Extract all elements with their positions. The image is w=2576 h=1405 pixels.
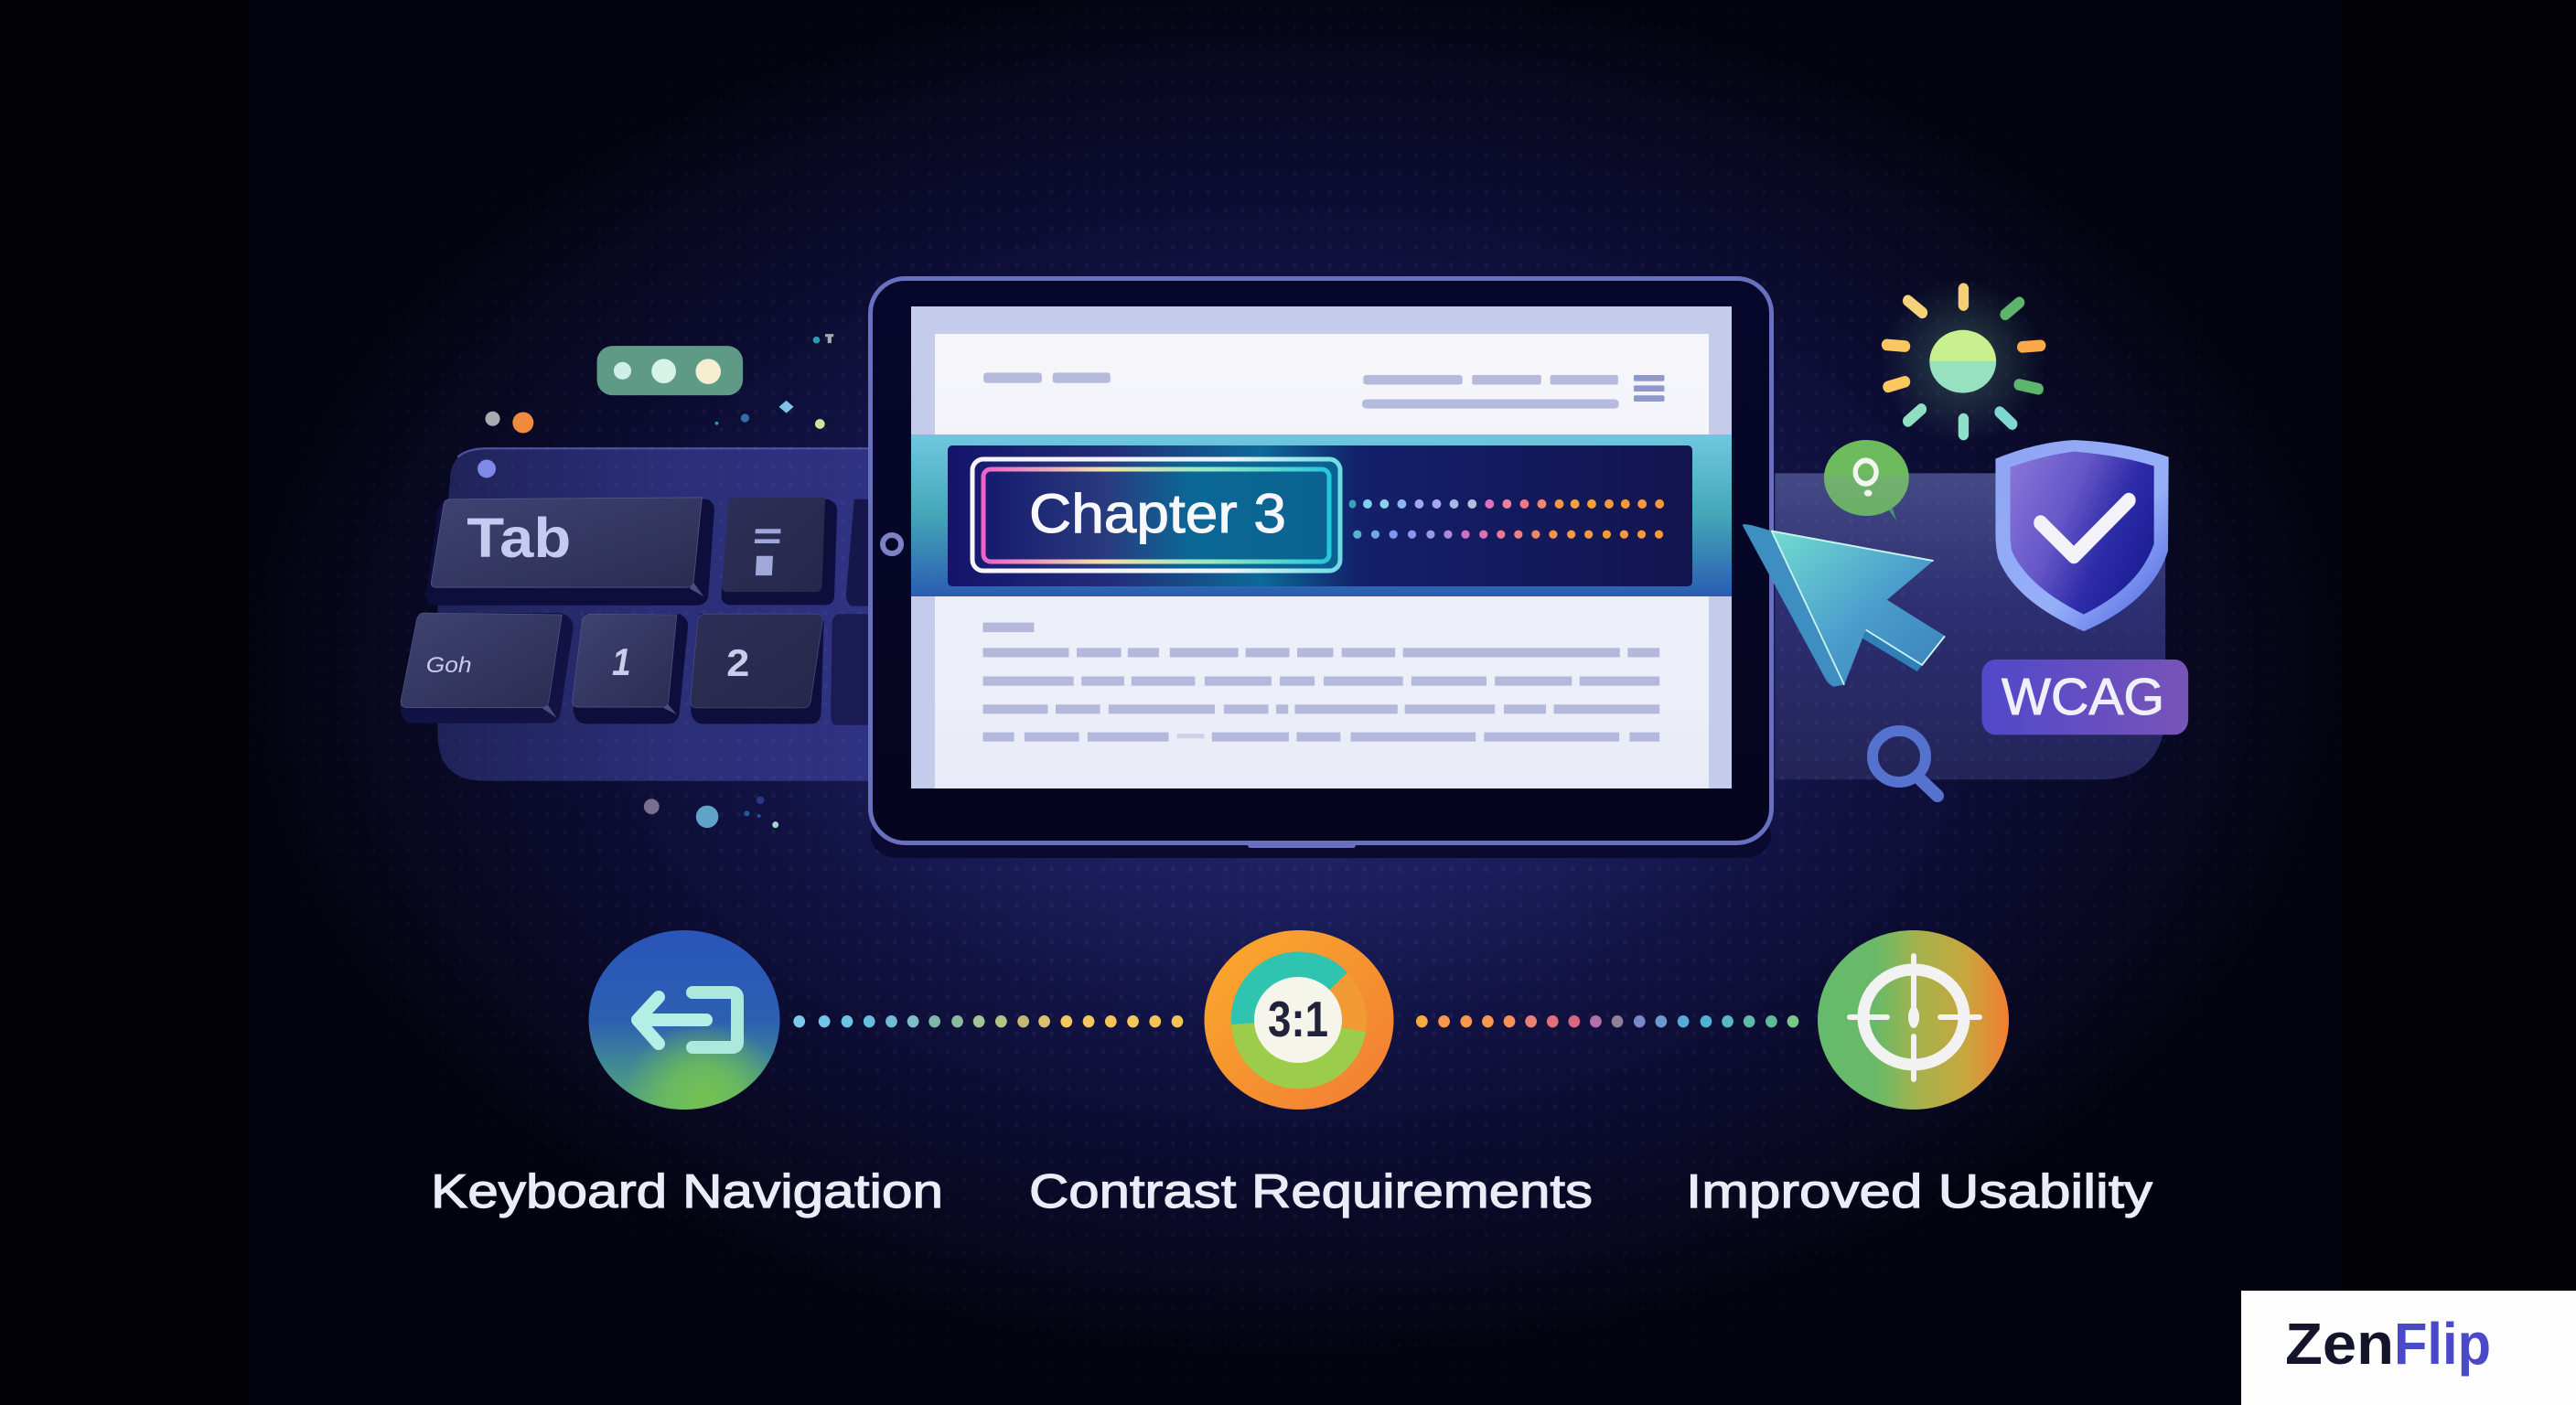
dot grid texture bbox=[459, 80, 2131, 1255]
badge label: WCAG: WCAG bbox=[2002, 668, 2164, 726]
chapter band bbox=[911, 434, 1732, 596]
header skeleton lines bbox=[983, 372, 1664, 409]
key: 1 bbox=[573, 614, 688, 724]
icon: keyboard navigation circle bbox=[589, 930, 779, 1110]
tablet body bbox=[871, 278, 1771, 843]
label: Improved Usability: Improved Usability bbox=[1686, 1165, 2152, 1218]
status pill bbox=[597, 346, 743, 395]
key: menu bbox=[721, 498, 837, 605]
key: 2 bbox=[691, 614, 824, 724]
dotted progress lines bbox=[1349, 499, 1664, 539]
key: Tab: Tab bbox=[467, 507, 571, 569]
key: Goh: Goh bbox=[426, 653, 472, 678]
panel: keyboard backing plate bbox=[437, 448, 870, 781]
logo: ZenFlip bbox=[2241, 1291, 2576, 1405]
body text skeleton lines bbox=[983, 623, 1659, 742]
tablet shadow bbox=[871, 814, 1771, 858]
camera ring bbox=[883, 535, 901, 553]
icon: shield with check bbox=[1995, 440, 2169, 631]
panel: right backing plate bbox=[1775, 473, 2165, 779]
tablet home bar bbox=[1248, 842, 1356, 848]
dotted connector: contrast to usability bbox=[1416, 1015, 1798, 1027]
key: partial bottom right bbox=[831, 614, 870, 725]
focus box: Chapter 3: Chapter 3 bbox=[1029, 483, 1286, 544]
icon: crosshair usability circle bbox=[1818, 930, 2009, 1110]
key: Goh bbox=[400, 613, 574, 724]
icon: contrast ratio circle: 3:1 bbox=[1268, 991, 1328, 1047]
tablet screen bbox=[911, 306, 1732, 788]
icon: magnifier bbox=[1873, 731, 1937, 796]
icon: cursor arrow bbox=[1743, 524, 1945, 687]
logo: ZenFlip: Flip bbox=[2394, 1311, 2491, 1377]
logo: ZenFlip: Zen bbox=[2285, 1311, 2394, 1377]
key: 2: 2 bbox=[726, 642, 749, 684]
icon: contrast ratio circle bbox=[1204, 930, 1394, 1110]
tablet bbox=[871, 278, 1771, 858]
key: 1: 1 bbox=[612, 641, 631, 683]
key: Tab bbox=[426, 498, 714, 606]
badge: WCAG bbox=[1981, 660, 2188, 735]
decorative dots and status pill bbox=[478, 334, 833, 828]
icons right cluster bbox=[1743, 278, 2188, 735]
label: Keyboard Navigation: Keyboard Navigation bbox=[431, 1165, 943, 1218]
focus box: Chapter 3 bbox=[972, 459, 1340, 571]
key: partial top right bbox=[846, 499, 870, 606]
dotted connector: keyboard to contrast bbox=[793, 1015, 1183, 1027]
icon: green speech bubble bbox=[1824, 440, 1909, 520]
icon: sun bbox=[1881, 278, 2045, 445]
keyboard bbox=[400, 498, 870, 725]
label: Contrast Requirements: Contrast Requirements bbox=[1029, 1165, 1593, 1218]
